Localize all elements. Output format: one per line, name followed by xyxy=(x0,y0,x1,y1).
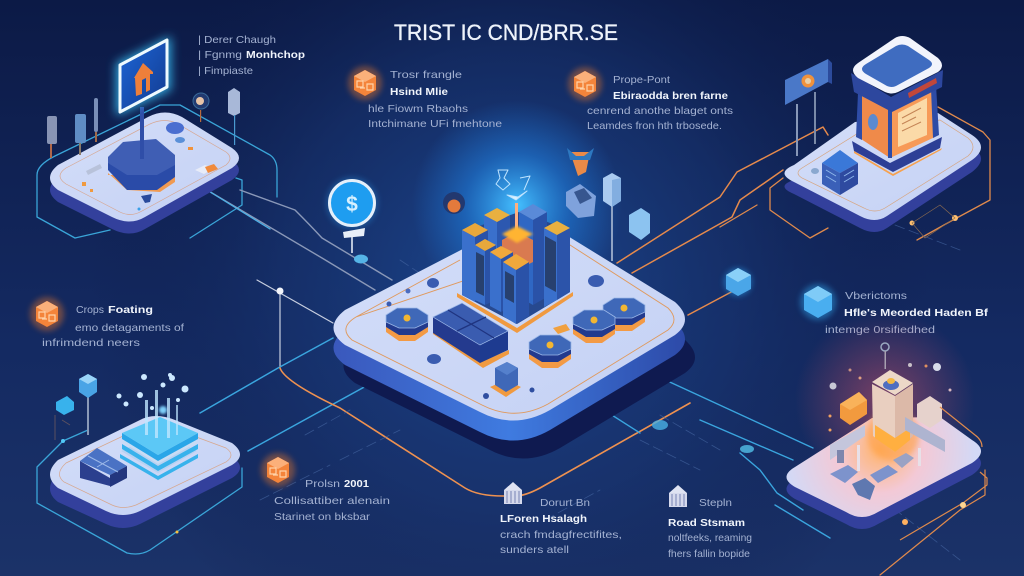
small cubes and pole xyxy=(55,374,178,534)
icon: orange hexagon xyxy=(568,67,602,101)
text block: top centre right xyxy=(568,67,733,132)
text block: top left: | Fgnmg xyxy=(198,49,242,61)
text block: bottom right: Stepln xyxy=(699,497,732,509)
text block: bottom right: fhers fallin bopide xyxy=(668,548,750,560)
platform side xyxy=(784,125,981,232)
faint circuits xyxy=(260,225,960,560)
kiosk body xyxy=(858,93,890,158)
text block: top left: | Derer Chaugh xyxy=(198,34,276,46)
platform surface xyxy=(784,113,981,220)
cyan lines: top-left platform lower loop xyxy=(75,178,242,238)
coin icon: $ xyxy=(346,193,358,216)
icon: blue hex cube xyxy=(800,284,836,320)
icon: orange cube xyxy=(348,66,382,100)
icon: building xyxy=(669,485,687,507)
cyan lines: top-left platform loop xyxy=(37,105,277,238)
icon: building xyxy=(504,482,522,504)
panel: bottom-right platform xyxy=(786,310,987,540)
platform surface xyxy=(50,112,239,222)
sparkles above tower xyxy=(496,170,530,200)
text block: bottom centre: Dorurt Bn xyxy=(540,497,590,509)
floating ball xyxy=(443,192,465,214)
floating elements xyxy=(276,148,754,453)
text block: right: Hfle's Meorded Haden Bf xyxy=(844,307,989,319)
cyan lines: centre to bottom-right xyxy=(593,372,830,538)
tower cluster xyxy=(457,203,573,333)
glowing core xyxy=(502,203,533,270)
text block: bottom left: Collisattiber alenain xyxy=(274,495,390,507)
kiosk xyxy=(851,36,943,176)
icon: orange cube xyxy=(30,297,64,331)
small parts xyxy=(386,275,604,399)
node disc xyxy=(652,420,668,430)
text block: bottom centre: LForen Hsalagh xyxy=(500,513,587,525)
orange lines: top-right platform xyxy=(720,107,990,240)
small devices xyxy=(47,88,240,158)
text block: left middle: Foating xyxy=(108,304,153,316)
platform surface xyxy=(50,416,240,515)
panel: top-right platform xyxy=(784,36,981,238)
platform trace xyxy=(346,245,674,413)
floating box on pole xyxy=(603,173,621,261)
back towers xyxy=(484,204,570,307)
platform side xyxy=(334,238,685,441)
orange nodes xyxy=(910,205,958,238)
octagon base xyxy=(108,173,175,192)
text block: bottom left: 2001 xyxy=(344,478,369,490)
layered stack xyxy=(120,417,198,480)
text block: bottom centre: sunders atell xyxy=(500,544,569,556)
chip: back-right octagon xyxy=(603,298,645,331)
text block: top centre right: cenrend anothe blaget onts xyxy=(587,105,733,117)
node xyxy=(276,288,284,294)
text block: left middle: Crops xyxy=(76,304,104,316)
white line through node xyxy=(257,280,333,368)
text block: top left: | Fimpiaste xyxy=(198,65,253,77)
orange trace and nodes xyxy=(900,407,987,540)
kiosk base xyxy=(852,137,942,172)
text block: right xyxy=(800,284,989,336)
orange lines: bottom-right xyxy=(880,470,985,575)
text block: bottom left: Prolsn xyxy=(305,478,340,490)
text block: top centre left: hle Fiowm Rbaohs xyxy=(368,103,468,115)
chip: right octagon xyxy=(573,310,615,343)
text block: bottom right xyxy=(668,485,752,560)
data particles xyxy=(116,373,188,438)
side machines xyxy=(830,396,945,463)
text block: bottom left: Starinet on bksbar xyxy=(274,511,371,523)
cyan lines: left to centre xyxy=(200,338,377,451)
node disc right xyxy=(740,445,754,453)
small cube xyxy=(490,362,521,397)
chip: left octagon xyxy=(386,308,428,341)
orange lines: to top-right xyxy=(617,127,828,315)
platform surface xyxy=(334,218,685,421)
tower base xyxy=(457,292,573,333)
text block: top left xyxy=(198,34,305,77)
text block: bottom centre: crach fmdagfrectifites, xyxy=(500,529,622,541)
text block: bottom right: noltfeeks, reaming xyxy=(668,532,752,544)
chip: front octagon xyxy=(529,335,571,368)
platform shadow xyxy=(344,256,695,459)
icon: orange cube xyxy=(261,453,295,487)
panel: bottom-left platform xyxy=(50,373,240,534)
text block: top centre left: Hsind Mlie xyxy=(390,86,448,98)
server blocks xyxy=(80,448,127,487)
text block: left middle: emo detagaments of xyxy=(75,322,184,334)
coin icon xyxy=(326,177,378,264)
chip: four-tile block xyxy=(433,303,509,368)
ground modules xyxy=(830,445,921,500)
surface details xyxy=(82,122,218,210)
platform side xyxy=(50,428,240,528)
text block: top centre right: Ebiraodda bren farne xyxy=(613,90,728,102)
connector lines xyxy=(37,105,990,575)
orange line: bottom curve xyxy=(280,368,690,496)
cyan line stub xyxy=(207,190,270,229)
glowing tower xyxy=(867,370,919,461)
text block: bottom centre xyxy=(500,482,622,556)
text block: right: Vberictoms xyxy=(845,290,907,302)
title: TRIST IC CND/BRR.SE xyxy=(394,20,618,45)
red glow xyxy=(795,310,975,500)
cyan line: bottom-left loop xyxy=(37,430,242,554)
text block: left middle xyxy=(30,297,184,349)
text block: top centre right: Leamdes fron hth trbosede. xyxy=(587,120,722,132)
kiosk collar xyxy=(851,70,943,112)
text block: bottom right: Road Stsmam xyxy=(668,517,745,529)
orange cube xyxy=(840,392,867,425)
platform surface xyxy=(786,417,981,517)
platform side xyxy=(786,429,981,529)
cyan cube xyxy=(724,268,752,296)
floating emblem xyxy=(566,148,596,218)
panel: central platform xyxy=(334,203,695,459)
floating block xyxy=(629,208,650,240)
white connector lines to centre xyxy=(207,190,392,290)
text block: top left: Monhchop xyxy=(246,49,305,61)
text block: bottom left xyxy=(261,453,390,523)
text block: top centre right: Prope-Pont xyxy=(613,74,670,86)
text block: top centre left: Trosr frangle xyxy=(390,69,462,81)
blue cube xyxy=(811,150,858,195)
glowing sign xyxy=(116,36,171,116)
pole xyxy=(140,107,144,159)
platform side xyxy=(50,124,239,234)
tower filler xyxy=(462,212,570,324)
front towers xyxy=(462,223,529,324)
kiosk paper xyxy=(898,98,927,147)
text block: top centre left: Intchimane UFi fmehtone xyxy=(368,118,502,130)
text block: left middle: infrimdend neers xyxy=(42,337,140,349)
panel: top-left platform xyxy=(47,36,240,234)
sign on poles xyxy=(785,59,832,156)
kiosk cap xyxy=(853,36,942,94)
antenna and sparks xyxy=(828,343,952,432)
text block: top centre left xyxy=(348,66,502,130)
text block: right: intemge 0rsifiedhed xyxy=(825,324,935,336)
